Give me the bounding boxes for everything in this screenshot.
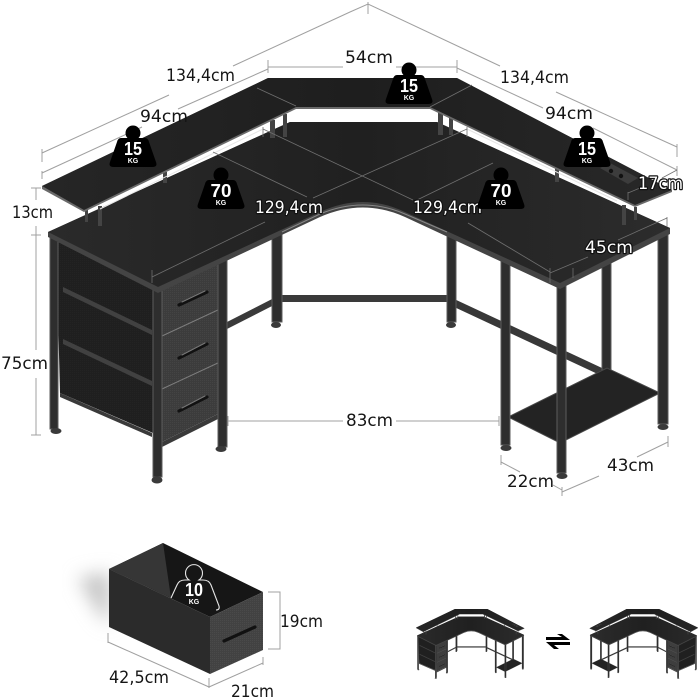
back legs and cross rails [227, 225, 611, 376]
weight badge 70 kg left: KG [216, 200, 227, 207]
swap arrows [546, 634, 570, 649]
drawer tower [50, 236, 227, 484]
label 43cm: 43cm [607, 456, 654, 476]
drawer handle [224, 627, 255, 641]
drawer load badge [171, 565, 219, 610]
drawer load badge: KG [189, 599, 200, 606]
power strip [600, 163, 638, 184]
weight badge 15 kg left: 15 [124, 139, 142, 159]
drawer load badge: 10 [185, 580, 203, 600]
label 134,4cm left: 134,4cm [166, 66, 235, 86]
weight badge 15 kg centre [386, 62, 432, 104]
label 94cm left: 94cm [140, 107, 188, 127]
label 129,4cm left: 129,4cm [255, 198, 323, 218]
label 54cm: 54cm [345, 48, 393, 68]
weight badge 15 kg left [110, 126, 156, 167]
mini desk, drawers right [590, 609, 698, 679]
drawer handles [179, 291, 207, 411]
weight badge 15 kg left: KG [128, 158, 139, 165]
label 83cm: 83cm [346, 411, 393, 431]
on-desk guide lines [152, 85, 677, 283]
label 17cm: 17cm [638, 174, 683, 194]
lower shelf [508, 368, 660, 443]
fabric drawer box [78, 543, 323, 700]
label 19cm: 19cm [280, 612, 323, 632]
drawer inner left wall [109, 543, 171, 598]
weight badge 70 kg left [198, 168, 244, 209]
L-shaped desk illustration [42, 78, 672, 484]
measurements [1, 48, 683, 492]
label 129,4cm right: 129,4cm [413, 198, 482, 218]
drawer dimension lines [108, 592, 280, 688]
desk top [48, 122, 670, 293]
dimension lines [31, 2, 677, 496]
drawer front panels [109, 569, 210, 674]
weight badge 70 kg right: KG [496, 200, 507, 207]
LED strips [100, 129, 617, 209]
weight badge 15 kg centre: KG [404, 95, 415, 102]
label 94cm right: 94cm [545, 104, 593, 124]
label 13cm: 13cm [12, 203, 53, 223]
weight badge 15 kg right: 15 [578, 139, 596, 159]
weight badge 70 kg right [478, 168, 524, 209]
label 45cm: 45cm [585, 238, 633, 258]
weight badge 15 kg right [564, 126, 610, 167]
label 134,4cm right: 134,4cm [500, 68, 569, 88]
right legs [500, 232, 668, 479]
drawer shadow [78, 572, 110, 625]
drawer interior [109, 543, 263, 617]
label 75cm: 75cm [1, 354, 48, 374]
label 22cm: 22cm [507, 472, 554, 492]
shelf supports [85, 112, 637, 226]
weight badge 15 kg centre: 15 [400, 76, 418, 96]
weight badge 70 kg left: 70 [210, 181, 232, 201]
label 42,5cm: 42,5cm [109, 668, 169, 688]
weight badge 15 kg right: KG [582, 158, 593, 165]
mini desk, drawers left [416, 609, 524, 679]
weight badge 70 kg right: 70 [490, 181, 512, 201]
monitor shelf [42, 78, 672, 212]
